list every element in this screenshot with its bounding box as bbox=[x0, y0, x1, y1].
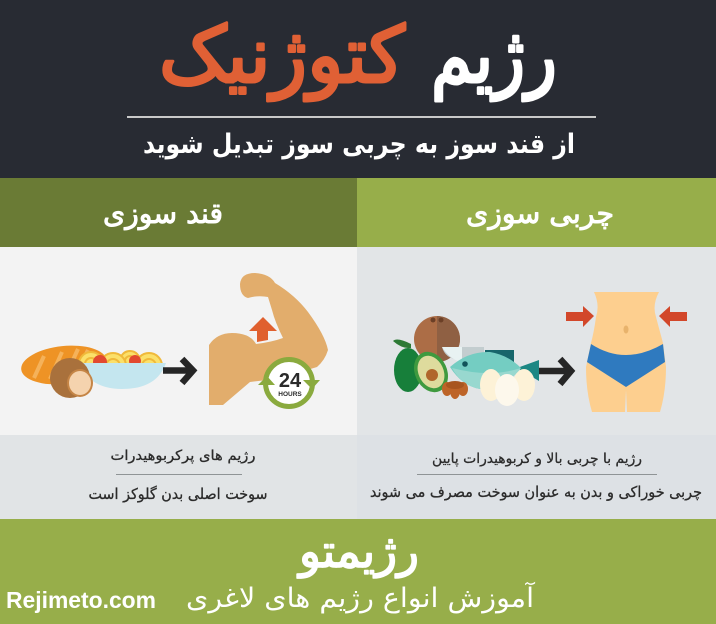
panel: sugar burning caption bbox=[0, 435, 357, 519]
badge label: HOURS bbox=[278, 391, 302, 398]
panel: sugar burning illustration background bbox=[0, 247, 357, 435]
icon: flexed arm bbox=[209, 273, 328, 405]
caption line 2: چربی خوراکی و بدن به عنوان سوخت مصرف می شوند bbox=[370, 483, 702, 501]
icon: 24 hours badge bbox=[258, 360, 320, 406]
icon: coconut bbox=[414, 316, 514, 368]
arrow: left squeeze bbox=[566, 306, 594, 327]
badge number: 24 bbox=[279, 370, 302, 392]
panel: footer bbox=[0, 519, 716, 624]
caption line 2: سوخت اصلی بدن گلوکز است bbox=[88, 485, 268, 503]
icon: up arrow bbox=[249, 317, 277, 342]
icon: avocado bbox=[393, 340, 454, 398]
panel: sugar burning heading bbox=[0, 178, 357, 247]
icon: fish bbox=[450, 352, 539, 389]
panel: fat burning illustration background bbox=[357, 247, 716, 435]
arrow: fats to waist bbox=[539, 359, 571, 384]
panel: fat burning caption bbox=[357, 435, 716, 519]
panel: title header bbox=[0, 0, 716, 178]
panel: fat burning heading bbox=[357, 178, 716, 247]
icon: bread bbox=[19, 342, 109, 388]
caption line 1: رژیم های پرکربوهیدرات bbox=[110, 448, 256, 464]
tagline: آموزش انواع رژیم های لاغری bbox=[186, 582, 536, 614]
icon: nuts bbox=[442, 381, 468, 399]
brand name: رژیمتو bbox=[297, 524, 419, 579]
subtitle: از قند سوز به چربی سوز تبدیل شوید bbox=[143, 129, 575, 160]
panel: fat burning heading: چربی سوزی bbox=[466, 197, 614, 230]
website url: Rejimeto.com bbox=[6, 587, 156, 613]
icon: eggs bbox=[480, 369, 535, 406]
arrow: right squeeze bbox=[659, 306, 687, 327]
caption line 1: رژیم با چربی بالا و کربوهیدرات پایین bbox=[432, 451, 642, 467]
title: ketogenic: کتوژنیک bbox=[159, 11, 406, 102]
arrow: carbs to muscle bbox=[163, 359, 193, 383]
title: diet: رژیم bbox=[431, 11, 557, 101]
icon: waist bbox=[586, 292, 666, 412]
panel: sugar burning heading: قند سوزی bbox=[103, 197, 223, 230]
icon: potato bbox=[50, 358, 93, 398]
underwear bbox=[587, 344, 665, 387]
navel bbox=[624, 326, 628, 334]
icon: pasta bowl bbox=[78, 351, 166, 389]
